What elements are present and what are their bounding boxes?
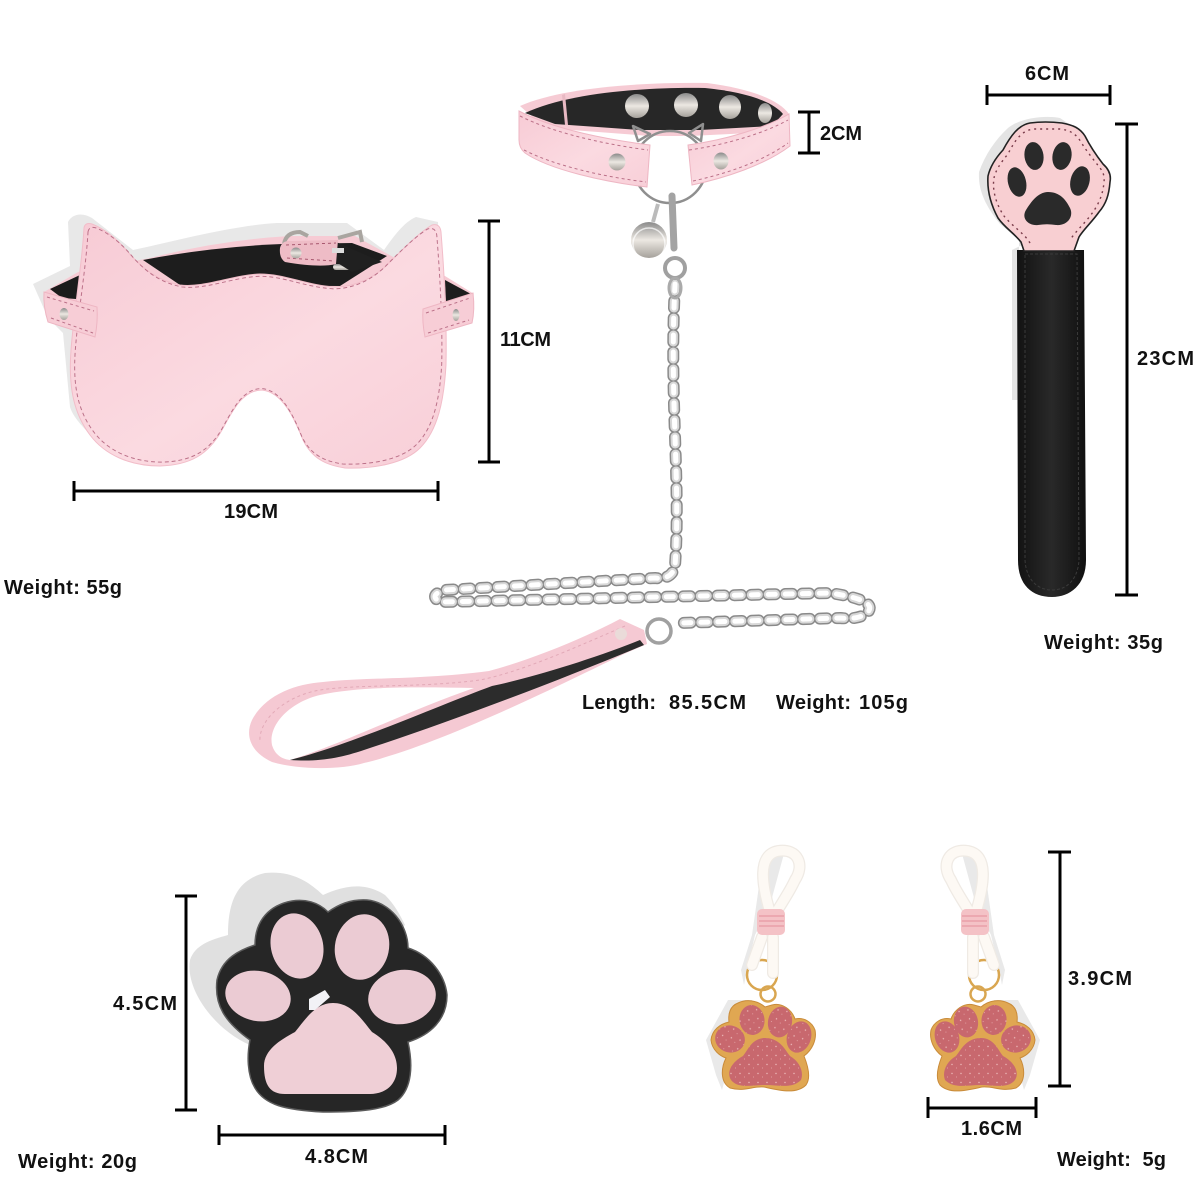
weight: leash: 105g <box>859 692 908 714</box>
charm paw <box>711 1001 815 1091</box>
charm silicone loop <box>752 851 800 973</box>
collar inner black <box>525 88 783 130</box>
dimension: charm height 3.9CM <box>1048 852 1132 1086</box>
weight: mask: Weight: 55g <box>4 577 122 599</box>
dimension: candle width 4.8CM: 4.8CM <box>305 1146 368 1168</box>
collar snaps <box>625 93 772 123</box>
weight: charms: Weight: 5g <box>1057 1149 1166 1171</box>
cat ring <box>633 124 706 203</box>
product: collar and leash <box>249 83 870 768</box>
mask strap <box>44 236 474 316</box>
dimension: collar height 2CM <box>798 112 862 153</box>
charm small gold ring <box>760 986 776 1002</box>
candle wick <box>309 990 330 1010</box>
charm pink coil <box>757 909 785 935</box>
leash length label: Length: <box>582 692 656 714</box>
candle pink pads <box>221 907 440 1094</box>
product: paw candle <box>189 873 447 1112</box>
product: right paw charm <box>931 849 1040 1091</box>
leash length label <box>582 692 746 714</box>
collar back band <box>520 83 789 136</box>
dimension: charm width 1.6CM: 1.6CM <box>961 1118 1022 1140</box>
weight: candle: Weight: 20g <box>18 1151 137 1173</box>
dimension: mask height 11CM: 11CM <box>500 329 551 351</box>
paddle shadow <box>979 117 1075 400</box>
paddle paw head <box>988 122 1110 251</box>
charm gold ring <box>747 960 777 990</box>
dimension: candle height 4.5CM <box>113 896 197 1110</box>
leash length label: 85.5CM <box>669 692 746 714</box>
dimension: mask height 11CM <box>478 221 551 462</box>
bell and clasp <box>631 196 685 298</box>
charm shadow <box>706 849 785 1090</box>
dimension: mask width 19CM: 19CM <box>224 501 278 523</box>
right strap tab <box>423 293 474 337</box>
weight: leash <box>776 692 908 714</box>
paddle paw pads <box>1005 141 1093 225</box>
weight: paddle: Weight: 35g <box>1044 632 1163 654</box>
dimension: paddle width 6CM <box>987 63 1110 105</box>
collar front right <box>688 114 790 185</box>
product: paw paddle <box>979 117 1110 597</box>
leash handle <box>249 619 647 768</box>
weight: leash: Weight: <box>776 692 851 714</box>
mask body <box>70 224 446 468</box>
chain <box>435 284 870 623</box>
dimension: paddle length 23CM: 23CM <box>1137 348 1194 370</box>
dimension: paddle width 6CM: 6CM <box>1025 63 1069 85</box>
collar strap tip <box>562 94 568 125</box>
mask shadow <box>33 215 440 457</box>
dimension: mask width 19CM <box>74 481 438 523</box>
product: left paw charm <box>706 849 815 1091</box>
dimension: candle height 4.5CM: 4.5CM <box>113 993 177 1015</box>
candle shadow <box>189 873 405 1045</box>
leash ring <box>647 619 671 643</box>
dimension: charm width 1.6CM <box>928 1097 1036 1140</box>
dimension: collar height 2CM: 2CM <box>820 123 862 145</box>
product: cat eye mask <box>33 215 474 468</box>
dimension: paddle length 23CM <box>1115 124 1194 595</box>
paddle handle <box>1017 250 1086 597</box>
candle black base <box>217 900 447 1112</box>
dimension: candle width 4.8CM <box>219 1125 445 1168</box>
mask buckle <box>280 232 382 272</box>
collar front left <box>519 111 650 187</box>
left strap tab <box>44 292 97 337</box>
dimension: charm height 3.9CM: 3.9CM <box>1068 968 1132 990</box>
